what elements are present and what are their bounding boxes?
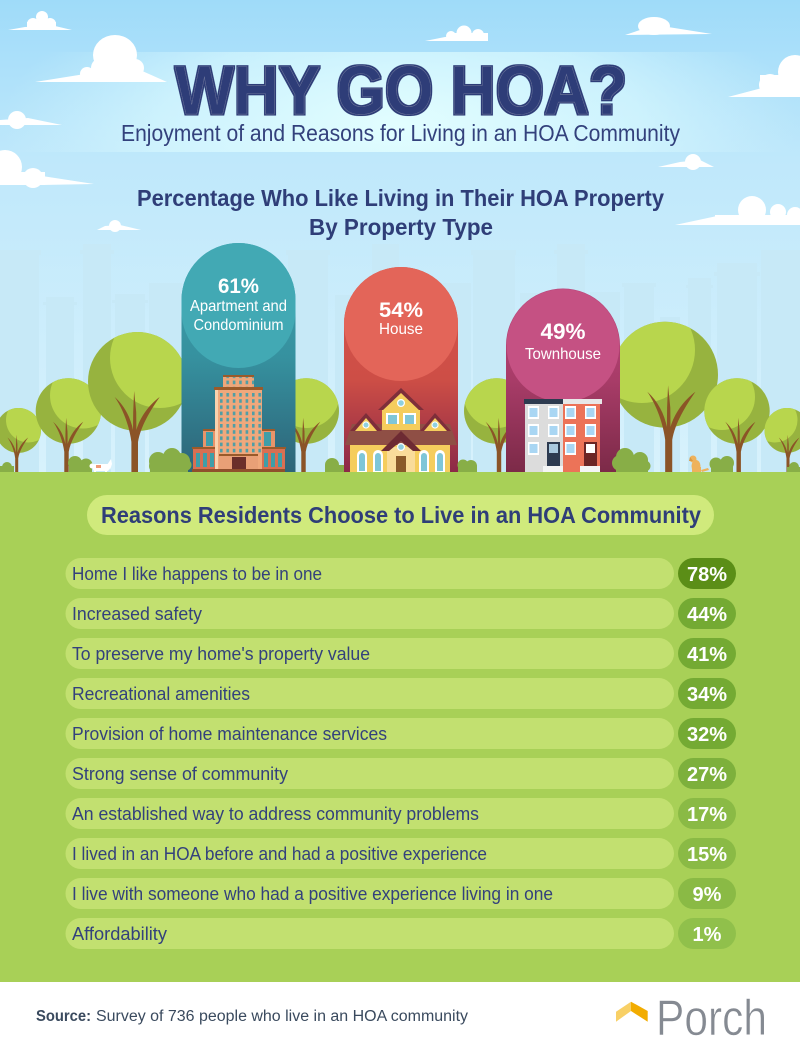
column: apartment and condominium: Condominium: [194, 317, 284, 334]
section heading: property type: Percentage Who Like Living in Their HOA Property: [137, 185, 664, 211]
row: property value: [66, 638, 736, 669]
row: lived in HOA before: [66, 838, 736, 869]
heading pill: reasons: Reasons Residents Choose to Live in an HOA Community: [101, 502, 701, 528]
column: apartment and condominium: Apartment and: [190, 298, 287, 315]
row: home maintenance: [66, 718, 736, 749]
row: affordability: Affordability: [72, 924, 167, 944]
section heading: property type: By Property Type: [309, 214, 493, 240]
icon: orange dog: [689, 456, 709, 472]
row: sense of community: 27%: [687, 764, 727, 786]
icon: house: [345, 388, 457, 472]
footer panel: [0, 982, 800, 1051]
row: home I like: [66, 558, 736, 589]
column: apartment and condominium: 61%: [218, 275, 259, 298]
row: home I like: 78%: [687, 564, 727, 586]
row: sense of community: Strong sense of community: [72, 764, 288, 784]
row: sense of community: [66, 758, 736, 789]
subtitle: Enjoyment of and Reasons for Living in an HOA Community: [121, 120, 680, 146]
sky background: [0, 0, 800, 480]
city skyline: [0, 244, 800, 472]
row: affordability: [66, 918, 736, 949]
source note: Survey of 736 people who live in an HOA community: [96, 1008, 468, 1025]
row: recreational amenities: Recreational amenities: [72, 684, 250, 704]
title: WHY GO HOA?: [175, 52, 627, 129]
clouds: [0, 11, 800, 232]
row: home maintenance: Provision of home maintenance services: [72, 724, 387, 744]
logo: Porch: [616, 990, 767, 1046]
bushes: [0, 448, 800, 473]
row: live with someone: 9%: [693, 884, 722, 906]
column: townhouse: Townhouse: [525, 346, 601, 363]
row: address problems: 17%: [687, 804, 727, 826]
icon: townhouses: [524, 399, 602, 472]
row: property value: 41%: [687, 644, 727, 666]
logo: Porch: Porch: [656, 990, 767, 1046]
column: house: 54%: [379, 299, 423, 322]
row: live with someone: I live with someone who had a positive experience living in one: [72, 884, 553, 904]
column: apartment and condominium: [182, 243, 296, 472]
column: townhouse: [506, 288, 620, 472]
icon: apartment building: [192, 375, 286, 472]
row: address problems: An established way to address community problems: [72, 804, 479, 824]
column: house: House: [379, 321, 423, 338]
row: increased safety: [66, 598, 736, 629]
row: increased safety: 44%: [687, 604, 727, 626]
row: live with someone: [66, 878, 736, 909]
row: property value: To preserve my home's property value: [72, 644, 370, 664]
source note: Source:: [36, 1008, 91, 1025]
green ground: [0, 472, 800, 982]
column: townhouse: 49%: [540, 319, 586, 344]
row: increased safety: Increased safety: [72, 604, 202, 624]
row: home I like: Home I like happens to be in one: [72, 564, 322, 584]
row: home maintenance: 32%: [687, 724, 727, 746]
icon: white dog: [90, 459, 112, 472]
row: address problems: [66, 798, 736, 829]
row: lived in HOA before: I lived in an HOA before and had a positive experience: [72, 844, 487, 864]
trees behind the columns: [0, 322, 800, 472]
row: recreational amenities: [66, 678, 736, 709]
section heading: property type: [137, 185, 664, 240]
row: affordability: 1%: [693, 924, 722, 946]
heading pill: reasons: [87, 495, 714, 535]
column: house: [344, 267, 458, 472]
row: lived in HOA before: 15%: [687, 844, 727, 866]
row: recreational amenities: 34%: [687, 684, 727, 706]
title glow band: [0, 52, 800, 152]
